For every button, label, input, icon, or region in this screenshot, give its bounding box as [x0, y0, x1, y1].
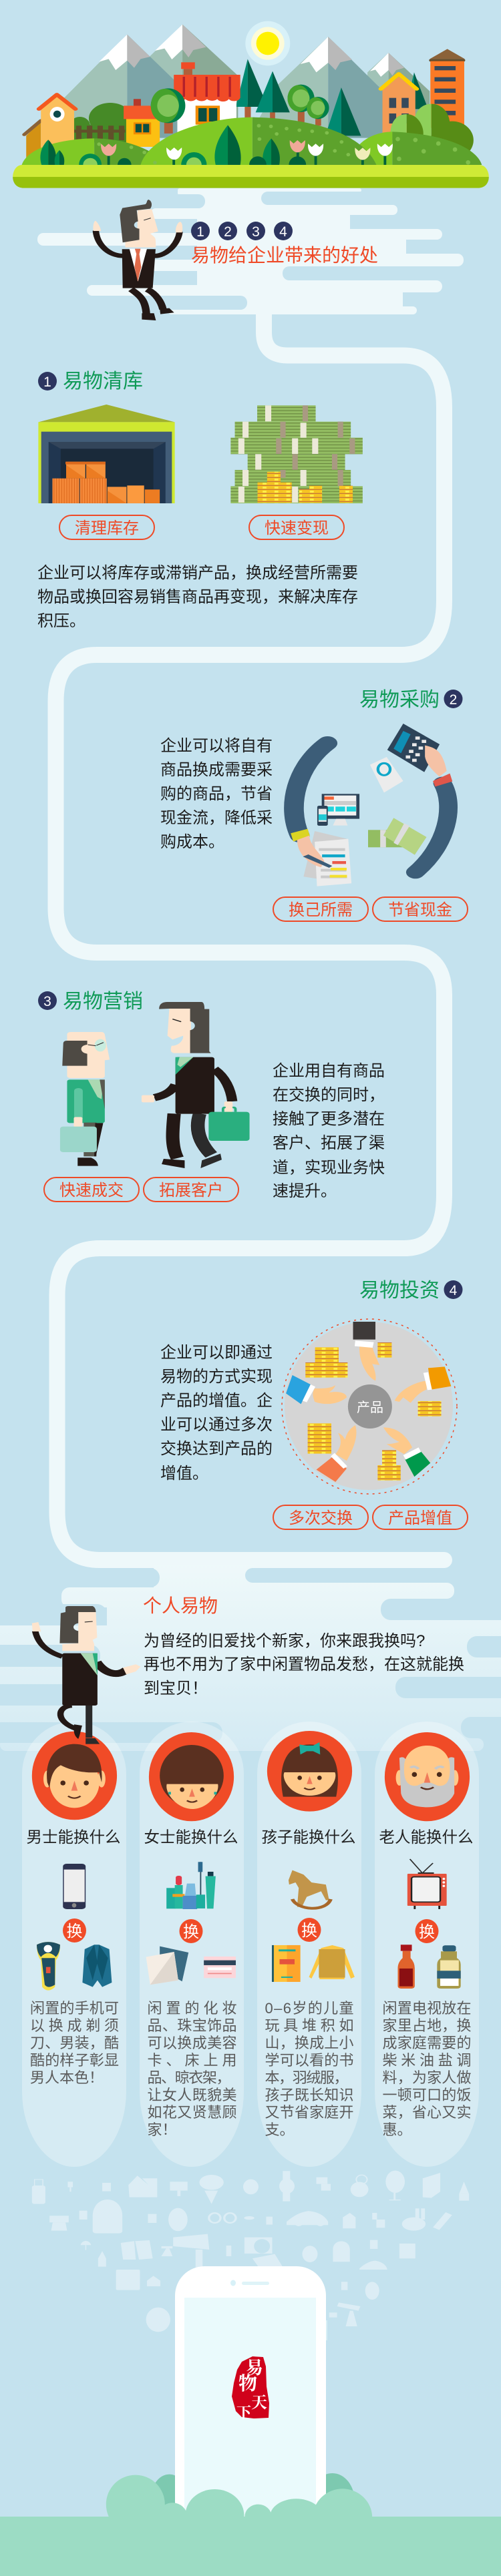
card 1 text: 刀、男装，酷 [30, 2035, 119, 2051]
tag: product value gain: 产品增值 [388, 1509, 452, 1527]
items: tv, sauce, seasoning [397, 1859, 461, 1989]
illustration: village landscape [13, 21, 489, 188]
numbered badges 1-4: 4 [279, 224, 287, 240]
card 2: women [144, 1732, 238, 2138]
personal intro text: 为曾经的旧爱找个新家，你来跟我换吗? [144, 1632, 425, 1650]
section 4 body text: 交换达到产品的 [160, 1440, 273, 1458]
section 4 body text: 产品的增值。企 [160, 1392, 273, 1410]
section 2 body text: 购的商品，节省 [160, 785, 273, 803]
personal intro text: 再也不用为了家中闲置物品发愁，在这就能换 [144, 1655, 464, 1673]
avatar: old man [385, 1732, 470, 1821]
card 4: seniors [379, 1732, 473, 2138]
section 4 body text: 企业可以即通过 [160, 1344, 273, 1362]
numbered badges 1-4: 1 [196, 224, 204, 240]
row 2 of item icons [49, 2200, 452, 2234]
person with briefcase [142, 1002, 250, 1168]
tag: multiple exchanges [273, 1505, 368, 1529]
personal exchange heading and intro [143, 1595, 464, 1698]
heading 1: 易物清库 [63, 370, 143, 393]
card 2 text: 品、晾衣架， [147, 2069, 231, 2086]
card 2 text: 卡、床上用 [147, 2052, 236, 2069]
seal logo: 天 [251, 2394, 267, 2412]
seal logo [232, 2356, 269, 2421]
card 3 text: 学可以看的书 [265, 2052, 354, 2069]
card 4 text: 成家庭需要的 [382, 2035, 472, 2051]
card 1 text: 酷的样子彰显 [30, 2052, 119, 2069]
section 4 body text: 易物的方式实现 [160, 1368, 273, 1386]
lower cloud band behind personal section [0, 1565, 501, 1751]
card 1 text: 以换成剃须 [30, 2017, 119, 2034]
heading 3: 易物营销 [63, 991, 143, 1013]
mountains [57, 25, 430, 138]
avatar: man [32, 1732, 117, 1820]
card 4 text: 闲置电视放在 [382, 2000, 472, 2017]
card 3 text: 支。 [265, 2121, 295, 2138]
swap badge: 换 [183, 1923, 199, 1941]
pine trees [236, 59, 428, 136]
tag: exchange for needs [273, 897, 368, 921]
section 3 body text: 道，实现业务快 [273, 1159, 385, 1177]
island base [13, 165, 489, 188]
section 4 body text: 增值。 [160, 1465, 208, 1483]
heading 1: 1 [43, 374, 51, 390]
phone mockup [175, 2266, 327, 2547]
card 3 text: 山，换成上小 [265, 2035, 354, 2051]
row 3 of item icons [81, 2234, 415, 2270]
heading 3: 3 [43, 994, 51, 1009]
card panels [22, 1722, 479, 2167]
section 1: inventory clearance [37, 370, 363, 630]
card 4 text: 料，为家人做 [382, 2069, 472, 2086]
tag: expand customers [144, 1178, 238, 1202]
card 2 text: 品、珠宝饰品 [147, 2017, 236, 2034]
card 2 text: 让女人既貌美 [147, 2087, 236, 2103]
tag: product value gain [373, 1505, 468, 1529]
swap badge [179, 1919, 203, 1943]
card 3 text: 本，羽绒服， [265, 2069, 349, 2086]
tag: quick cash [249, 515, 344, 539]
card 2 text: 闲置的化妆 [147, 2000, 236, 2017]
card 2 text: 家！ [147, 2121, 177, 2138]
seal logo: 易 [246, 2358, 263, 2378]
card 3 text: 又节省家庭开 [265, 2104, 354, 2121]
section 2 body text [160, 737, 273, 851]
seal logo: 物 [238, 2373, 257, 2394]
seal logo: 下 [236, 2404, 252, 2421]
section 3 body text: 速提升。 [273, 1182, 337, 1200]
tag: quick deal [44, 1178, 139, 1202]
big red roof house [174, 62, 240, 134]
tag: clear stock [59, 515, 154, 539]
section 1 body text: 物品或换回容易销售商品再变现，来解决库存 [37, 588, 358, 606]
section 3 body text: 接触了更多潜在 [273, 1110, 385, 1128]
label: what children can swap: 孩子能换什么 [262, 1828, 355, 1846]
faint item icon cloud [32, 2171, 469, 2332]
row 4 of item icons [116, 2270, 379, 2332]
card 4 text: 家里占地，换 [382, 2017, 472, 2034]
swap badge [415, 1919, 438, 1943]
card 1 text: 男人本色！ [30, 2069, 104, 2086]
illustration: businessman sitting on avatar [32, 1606, 140, 1744]
swap badge [63, 1918, 86, 1943]
tag: expand customers: 拓展客户 [159, 1182, 223, 1200]
left cottage [24, 95, 75, 158]
winding road [56, 314, 444, 1560]
icon: warehouse [38, 405, 175, 503]
card 4 text: 惠。 [382, 2121, 412, 2138]
section 3 body text: 在交换的同时， [273, 1086, 385, 1104]
section 1 body text: 积压。 [37, 612, 86, 630]
hills [22, 117, 482, 165]
section 3 body text: 客户、拓展了渠 [273, 1134, 385, 1152]
icon: money and coins [230, 405, 363, 503]
card 3 text: 孩子既长知识 [265, 2087, 354, 2103]
heading 2: 2 [450, 692, 457, 708]
swap badge: 换 [67, 1922, 83, 1941]
illustration: hands exchanging around product circle [282, 1319, 457, 1494]
title text: 易物给企业带来的好处 [191, 245, 378, 266]
personal intro text [144, 1632, 464, 1698]
upper cloud band behind heading [0, 188, 501, 314]
numbered badges 1-4: 3 [252, 224, 260, 240]
orange flats [381, 74, 417, 136]
section 2 body text: 现金流，降低采 [160, 809, 273, 827]
card 4 text [382, 2000, 472, 2138]
label: what women can swap: 女士能换什么 [144, 1828, 238, 1846]
section 4 body text: 业可以通过多次 [160, 1416, 273, 1434]
sun [245, 21, 290, 65]
avatar: girl [267, 1731, 352, 1812]
swap badge [298, 1918, 321, 1942]
heading 4: 4 [450, 1283, 458, 1298]
left bushes and fence [69, 103, 132, 142]
section 3 body text: 企业用自有商品 [273, 1062, 385, 1080]
personal heading: 个人易物 [143, 1595, 218, 1616]
items: rocking horse, book, jacket [272, 1870, 355, 1982]
product label: 产品 [357, 1400, 383, 1415]
section 3: marketing [38, 991, 385, 1202]
label: what seniors can swap: 老人能换什么 [379, 1828, 473, 1846]
section 1 body text [37, 564, 358, 630]
front bushes and ground [0, 2475, 501, 2576]
illustration: businessman arms raised [93, 200, 182, 320]
illustration: two businessmen meeting [60, 1002, 250, 1168]
card 2 text: 可以换成美容 [147, 2035, 236, 2051]
card 3 text: 玩具堆积如 [265, 2017, 354, 2034]
avatar: woman [149, 1732, 234, 1821]
yellow cottage and round tree [124, 88, 185, 147]
section 2: procurement [160, 689, 468, 921]
items: phone, shaver, suit [37, 1864, 112, 1991]
tower block [429, 49, 465, 128]
shrubs and tulips [40, 125, 393, 165]
camera and speaker [230, 2280, 327, 2340]
row 1 of item icons [32, 2171, 469, 2204]
tag: exchange for needs: 换己所需 [289, 901, 353, 919]
card 4 text: 菜，省心又实 [382, 2104, 472, 2121]
section 3 body text [273, 1062, 385, 1200]
tag: quick cash: 快速变现 [265, 519, 329, 537]
card 2 text: 如花又贤慧顾 [147, 2104, 236, 2121]
phone screen [184, 2298, 316, 2545]
tag: multiple exchanges: 多次交换 [289, 1509, 353, 1527]
heading 2: 易物采购 [359, 689, 440, 711]
card 3 text [265, 2000, 354, 2138]
tag: clear stock: 清理库存 [75, 519, 139, 537]
section 2 body text: 企业可以将自有 [160, 737, 273, 755]
section 4: investment [160, 1280, 468, 1529]
swap badge: 换 [301, 1922, 317, 1940]
person with glasses [60, 1032, 110, 1166]
card 2 text [147, 2000, 236, 2138]
card 1: men [27, 1732, 120, 2086]
card 4 text: 柴米油盐调 [382, 2052, 472, 2069]
section 2 body text: 商品换成需要采 [160, 761, 273, 779]
dark back bushes [150, 2473, 355, 2529]
label: what men can swap: 男士能换什么 [27, 1828, 120, 1846]
numbered badges 1-4: 2 [224, 224, 232, 240]
personal intro text: 到宝贝！ [144, 1680, 208, 1698]
items: cosmetics, pillows, card [146, 1862, 236, 1985]
card 3: children [262, 1731, 355, 2138]
section 2 body text: 购成本。 [160, 833, 224, 851]
tag: save cash [373, 897, 468, 921]
right bushes [390, 104, 474, 159]
card 4 text: 一顿可口的饭 [382, 2087, 472, 2103]
card 3 text: 0–6岁的儿童 [265, 2000, 354, 2017]
section 1 body text: 企业可以将库存或滞销产品，换成经营所需要 [37, 564, 358, 582]
heading 4: 易物投资 [359, 1280, 440, 1302]
swap badge: 换 [419, 1923, 435, 1941]
numbered badges 1-4 [191, 222, 293, 240]
tag: save cash: 节省现金 [388, 901, 452, 919]
title block [191, 222, 378, 266]
card 1 text: 闲置的手机可 [30, 2000, 119, 2017]
card 1 text [30, 2000, 119, 2086]
illustration: hands with calculator, papers and cash [291, 724, 452, 886]
tag: quick deal: 快速成交 [59, 1182, 124, 1200]
section 4 body text [160, 1344, 273, 1483]
